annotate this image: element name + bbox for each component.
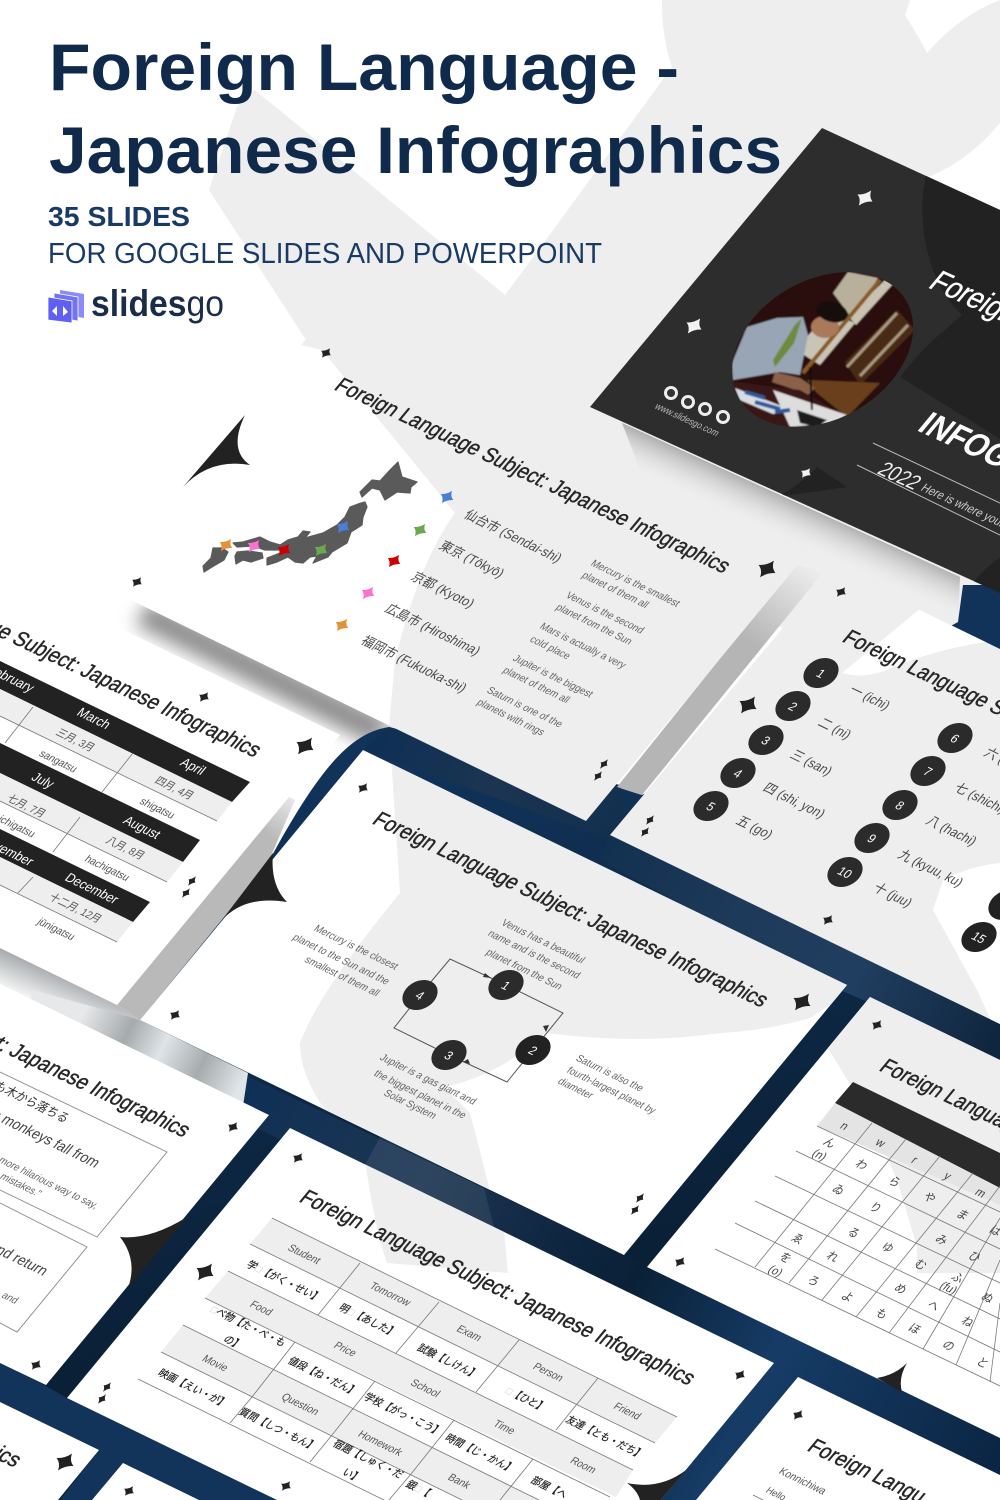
kana labels: ゆ [878,1240,897,1256]
kana labels: み [932,1232,951,1248]
big dark corner shape [120,1217,187,1288]
slide: vocabulary table [67,1120,774,1500]
table labels: 試験【しけん】 [414,1341,482,1381]
table labels: 明□【あした】 [336,1302,400,1339]
kana labels: ら [885,1174,904,1190]
kana labels: ゐ [829,1182,848,1198]
node numbers: 1 [498,979,513,993]
number labels: 九 (kyuu, ku) [895,847,967,889]
table labels: 時間【じ・かん】 [442,1432,518,1475]
romaji header row [817,1103,1000,1205]
map location stars [215,518,354,559]
badge numbers: 8 [892,799,907,813]
kana labels: と [973,1355,992,1371]
planet descriptions: Jupiter is the biggest [510,653,595,700]
month table: jūnigatsu [34,916,78,943]
month table: 十二月, 12月 [46,891,105,926]
social icons [664,386,730,424]
kana labels: ほ [905,1321,924,1337]
table labels: Exam [454,1323,485,1344]
number labels: 八 (hachi) [923,813,980,848]
proverb boxes [0,1072,167,1332]
legend: 京都 (Kyoto) [408,569,478,611]
kana labels: ふ [948,1270,967,1286]
white area of map slide [90,340,455,740]
month table: 八月, 8月 [103,835,147,862]
month table: hachigatsu [82,853,132,884]
month table: July [28,769,58,791]
month table: 七月, 7月 [4,793,48,820]
slide: bottom-left partial [0,1268,99,1500]
greeting text: Konnichiwa [776,1466,829,1497]
cycle captions [290,918,659,1122]
kana labels: ん [820,1135,839,1151]
month table: December [62,870,123,907]
table labels: Friend [611,1401,644,1423]
kana labels: ゑ [788,1231,807,1247]
month table: shigatsu [137,796,178,821]
kana labels: y [941,1170,954,1183]
cycle captions: Mercury is the closest [311,924,400,972]
kana labels: n [837,1119,852,1133]
number labels: 十 (juu) [870,880,916,910]
slide title: Foreign Language Subject: Japanese Infographics [368,808,774,1012]
table labels: Price [331,1340,359,1359]
planet descriptions: Venus is the second [563,590,646,636]
big dark corner shape [183,415,250,487]
badge numbers: 4 [730,767,745,781]
logo icon [48,290,84,323]
number labels: 四 (shi, yon) [760,780,829,821]
cycle captions: planet from the Sun [483,947,564,992]
slide: cycle diagram [140,750,847,1255]
kana labels: り [866,1200,885,1216]
table labels: い】 [339,1466,365,1485]
cycle connector [394,959,563,1082]
kana labels: へ [924,1298,943,1314]
slide: map of Japan [135,330,794,821]
cover rules [857,443,1000,535]
kana labels: ひ [965,1249,984,1265]
kana grid [715,1123,1000,1386]
table header bar [835,1082,1000,1188]
table labels: 映画【えい・が】 [155,1366,232,1410]
badge numbers: 5 [703,800,718,814]
planet descriptions: planet from the Sun [553,602,634,647]
slide: kana table [647,980,1000,1438]
cover shadow [622,423,960,625]
table labels: 宿題【しゅく・だ [330,1437,407,1481]
blue backdrop behind slides [0,585,1000,1500]
big dark corner shape [222,853,287,920]
slide: months table [0,558,340,1005]
grey shadow bands between slides [0,565,825,1106]
number labels [733,682,1000,910]
node numbers: 2 [525,1044,540,1058]
badge numbers: 6 [947,732,962,746]
photo of calligrapher [732,272,914,427]
table labels: Bank [445,1472,474,1492]
cover year and tagline [873,458,1000,530]
month table: April [177,755,209,778]
kana labels: r [908,1154,921,1166]
cycle nodes [395,965,558,1075]
number labels: 一 (ichi) [846,682,894,713]
table labels: School [408,1377,443,1400]
table labels: 学校【がっ・こう】 [361,1390,446,1438]
table labels: Person [530,1361,566,1384]
big dark corner shape [877,1363,907,1392]
slide: dark cover [590,128,1000,620]
slide title: Foreign Language Subject: Japanese Infographics [330,374,736,578]
badge numbers: 9 [864,832,879,846]
legend: 福岡市 (Fukuoka-shi) [358,633,470,695]
table labels [155,1242,648,1500]
month table: 三月, 3月 [53,727,97,754]
kana labels: を [776,1250,795,1266]
node numbers: 4 [412,989,427,1003]
slide: proverbs [0,938,269,1385]
number labels: 二 (ni) [815,715,855,742]
kana labels: む [911,1257,930,1273]
legend: 広島市 (Hiroshima) [382,601,484,658]
kana labels: や [920,1190,939,1206]
number badges [686,653,1000,957]
soft shadow of map slide [135,600,395,745]
cycle captions: Venus has a beautiful [499,918,587,966]
kana labels: の [939,1338,958,1354]
badge numbers: 2 [785,700,800,714]
cycle captions: name and is the second [485,929,582,981]
kana labels: w [872,1136,889,1150]
badge numbers [703,667,989,946]
table labels: □べ物【た・べ・も [208,1303,289,1349]
legend [331,488,565,695]
kana labels: め [891,1281,910,1297]
kana labels: ぬ [978,1290,997,1306]
proverb text [0,1073,103,1306]
table labels: Movie [199,1353,231,1374]
kana labels: (n) [809,1147,830,1163]
kana labels: ね [958,1314,977,1330]
table labels: の】 [220,1333,246,1352]
table labels: Question [278,1391,322,1418]
legend: 東京 (Tōkyō) [436,538,508,580]
badge numbers: 1 [813,667,828,681]
kana labels: m [972,1186,989,1200]
month table: 四月, 4月 [152,775,196,802]
greeting text [753,1466,829,1500]
main heading [49,30,782,187]
grey silhouette on slide [300,764,847,1190]
grey silhouette on slide [366,1164,508,1273]
kana labels: も [872,1306,891,1322]
darker cover shapes [777,170,1000,620]
cycle captions: diameter [555,1076,596,1102]
planet descriptions [474,558,682,738]
grey silhouette on slide [827,980,1000,1273]
table labels: Food [247,1299,275,1318]
table labels: 質問【しつ・もん】 [236,1405,321,1453]
kana labels: る [844,1225,863,1241]
table labels: Time [490,1418,518,1437]
cycle captions: Saturn is also the [573,1053,646,1094]
slide title: Foreign Language Subject: Japanese Infographics [295,1186,701,1390]
logo wordmark: slidesgo [91,283,224,324]
table labels: 友達【とも・だち】 [563,1413,648,1461]
table labels: □【ひと】 [503,1385,549,1414]
month table: August [120,813,164,842]
table labels: Student [285,1242,323,1267]
platforms: FOR GOOGLE SLIDES AND POWERPOINT [48,238,602,270]
node numbers [412,979,540,1063]
kana labels: (o) [765,1263,786,1279]
number labels: 三 (san) [787,747,836,778]
badge numbers: 3 [758,734,773,748]
badge numbers: 10 [834,864,855,881]
kana labels: (fu) [937,1279,960,1297]
month table: March [74,705,114,732]
cycle captions: Jupiter is a gas giant and [377,1053,478,1107]
white patches [842,610,1000,1024]
month table [0,661,250,943]
cycle captions: smallest of them all [302,955,382,999]
kana labels: わ [852,1157,871,1173]
kana labels: ま [953,1207,972,1223]
slide: greetings [696,1377,1000,1500]
slide count: 35 SLIDES [48,201,190,232]
planet descriptions: cold place [527,634,573,662]
website: www.slidesgo.com [652,401,722,438]
big dark corner shape [627,1470,686,1500]
planet descriptions: Saturn is one of the [484,685,565,730]
badge numbers: 7 [920,765,935,779]
planet descriptions: planet of them all [579,570,651,611]
month table: sangatsu [36,748,80,775]
decorative slide stars [27,187,886,1498]
table labels: Tomorrow [367,1280,414,1309]
Japan map [203,462,417,572]
cycle captions: the biggest planet in the [371,1069,469,1121]
table labels: Homework [355,1428,406,1459]
cycle captions: planet to the Sun and the [290,932,392,988]
slide: numbers [610,610,1000,1024]
planet descriptions: planet of them all [500,665,572,706]
table labels: Room [567,1455,599,1476]
legend: 仙台市 (Sendai-shi) [461,507,565,565]
planet descriptions: planets with rings [474,697,547,738]
planet descriptions: Mars is actually a very [537,621,629,672]
cycle captions: Solar System [381,1088,439,1122]
table header rows [161,1218,677,1500]
table labels: 学□【がく・せい】 [244,1258,325,1304]
main heading: Japanese Infographics [49,113,782,187]
kana labels: ろ [804,1273,823,1289]
kana labels: よ [838,1289,857,1305]
badge numbers: 15 [968,929,989,946]
slide: bottom partial [92,1463,199,1500]
planet descriptions: Mercury is the smallest [588,558,682,610]
number labels: 五 (go) [733,813,776,842]
main heading: Foreign Language - [49,30,679,104]
kana labels: れ [823,1249,842,1265]
node numbers: 3 [441,1049,456,1063]
cover year and tagline: 2022 [873,458,926,494]
table labels: 値段【ね・だん】 [285,1354,362,1398]
cycle captions: fourth-largest planet by [564,1065,659,1117]
table labels: 銀□【 [403,1478,434,1499]
kana labels [765,1119,1000,1371]
table grid [138,1218,677,1500]
